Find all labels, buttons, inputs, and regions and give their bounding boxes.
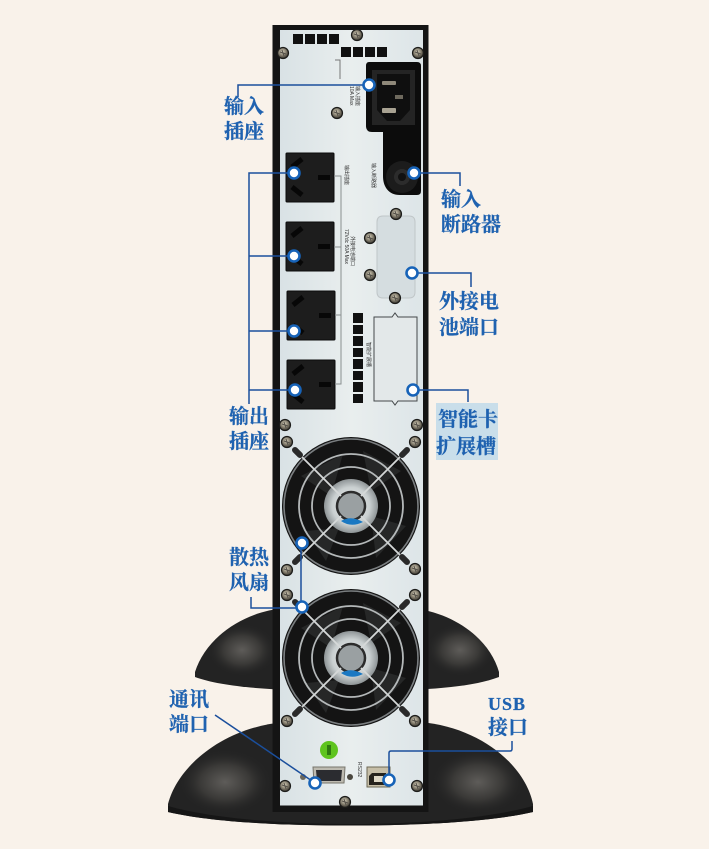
- small bracket mark: [335, 60, 340, 79]
- serial port: [300, 767, 353, 783]
- callout: input breaker: 断路器: [441, 212, 501, 236]
- callout: communication port: 端口: [169, 713, 209, 736]
- lower stand base: [165, 720, 537, 830]
- callout: input socket: [224, 80, 374, 143]
- UPS tower body: [272, 25, 428, 812]
- device labels: 智能扩展槽: [365, 342, 372, 367]
- callout: communication port: [169, 688, 320, 788]
- callout: smart card slot: 扩展槽: [436, 435, 496, 458]
- callout: output sockets: 插座: [229, 430, 270, 453]
- callout: input socket: 插座: [224, 120, 265, 143]
- callout: smart card slot: 智能卡: [438, 408, 498, 431]
- callout: output sockets: 输出: [229, 404, 269, 428]
- callout: external battery port: 池端口: [439, 316, 499, 339]
- external battery port plate: [364, 208, 415, 304]
- upper stand base: [195, 610, 499, 690]
- green certification mark: [320, 741, 338, 759]
- callout: cooling fans: 散热: [229, 546, 271, 569]
- panel screws: [278, 30, 424, 808]
- cooling fan 1: [282, 437, 420, 575]
- callout: USB port: [384, 694, 528, 786]
- callout: output sockets: [229, 168, 300, 453]
- device labels: 外接电池端口: [349, 236, 356, 266]
- callout: input socket: 输入: [224, 94, 264, 118]
- callout: USB port: USB: [488, 694, 526, 714]
- callout: communication port: 通讯: [169, 688, 209, 711]
- device labels: 10A Max: [348, 86, 354, 106]
- device labels: 72Vdc 50A Max: [343, 229, 349, 265]
- USB port: [367, 767, 390, 787]
- vent squares top: [293, 34, 387, 57]
- smart card slot: [374, 313, 417, 405]
- output sockets: [286, 153, 335, 409]
- callout: input breaker: [408, 168, 501, 236]
- device labels: 输入插座: [354, 86, 361, 106]
- callout: input breaker: 输入: [441, 187, 481, 211]
- device labels: RS232: [356, 762, 362, 778]
- vertical vent squares: [353, 313, 363, 403]
- device labels: 输出插座: [343, 165, 350, 185]
- callout: external battery port: 外接电: [439, 290, 499, 313]
- callout: external battery port: [406, 268, 499, 339]
- callout: USB port: 接口: [488, 716, 528, 739]
- cooling fan 2: [282, 589, 420, 727]
- output wiring marks: [334, 176, 341, 384]
- device labels: [343, 86, 377, 778]
- callout: cooling fans: [229, 538, 308, 612]
- input socket and breaker block: [366, 62, 421, 195]
- callout: smart card slot: [408, 384, 498, 460]
- callout: cooling fans: 风扇: [229, 571, 269, 594]
- device labels: 输入断路器: [370, 163, 377, 188]
